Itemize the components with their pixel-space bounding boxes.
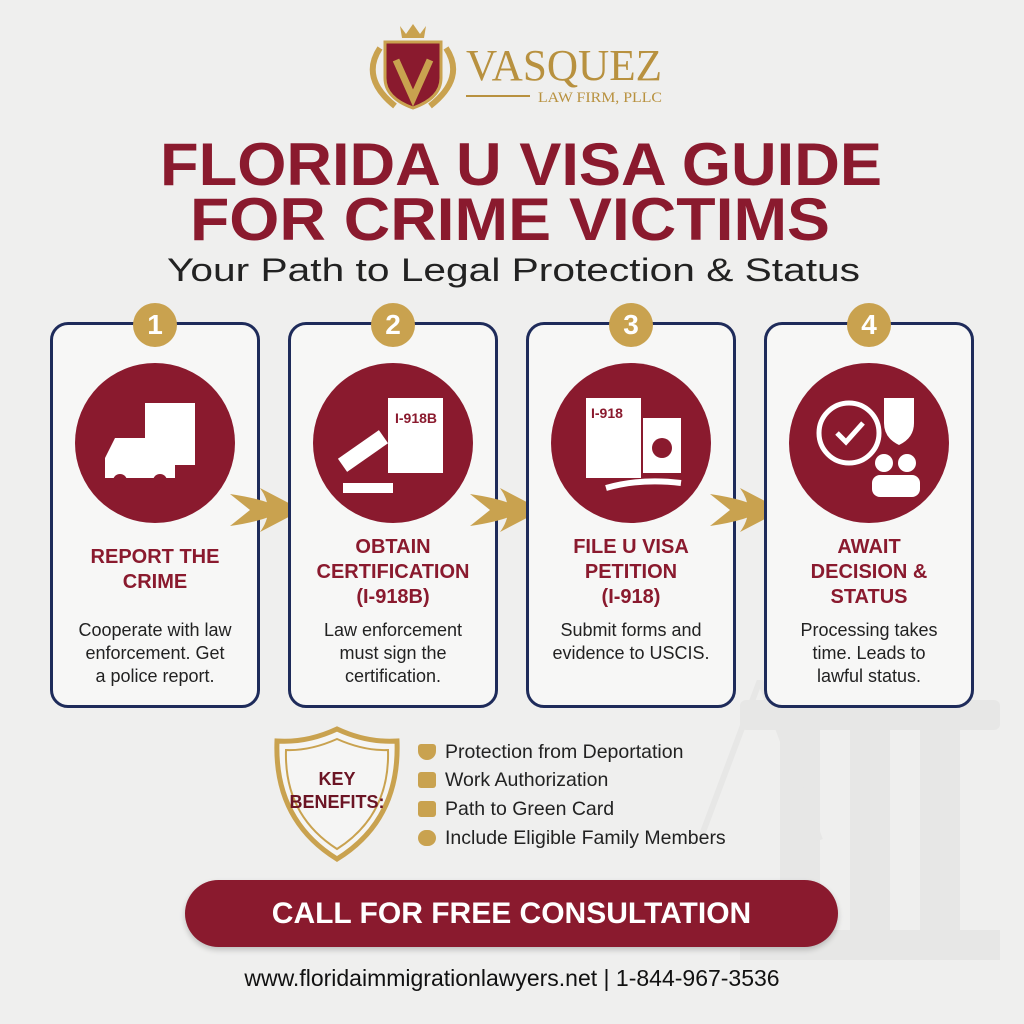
card 2: CERTIFICATION (317, 561, 469, 583)
icon: clock and family (789, 363, 949, 523)
card 4: time. Leads to (812, 643, 926, 663)
card 1: CRIME (123, 571, 187, 593)
card 2 (288, 322, 498, 708)
card 3: PETITION (585, 561, 677, 583)
key benefits shield: BENEFITS: (289, 792, 385, 812)
card 1: REPORT THE (91, 546, 219, 568)
card 1: Cooperate with law (78, 620, 232, 640)
card 3: (I-918) (602, 586, 660, 608)
card 2: Law enforcement (324, 620, 462, 640)
contact line: www.floridaimmigrationlawyers.net | 1-844-967-3536 (244, 965, 780, 991)
card 4 (764, 322, 974, 708)
card 3 (526, 322, 736, 708)
card 4: Processing takes (800, 620, 938, 640)
benefits list: Work Authorization (445, 769, 608, 791)
title: FLORIDA U VISA GUIDE (160, 131, 882, 198)
icon: gavel (313, 363, 473, 523)
CTA button (185, 880, 838, 947)
logo: VASQUEZ (466, 41, 662, 90)
arrow 3 (710, 488, 764, 532)
card 1: 1 (147, 309, 163, 340)
card 2: 2 (385, 309, 401, 340)
card 4: 4 (861, 309, 877, 340)
card 1: a police report. (95, 666, 215, 686)
CTA button: CALL FOR FREE CONSULTATION (272, 897, 751, 930)
title: FOR CRIME VICTIMS (190, 186, 830, 253)
icon: gavel: I-918B (395, 410, 437, 426)
benefits list: Path to Green Card (445, 798, 614, 820)
title (160, 131, 882, 288)
card 3: Submit forms and (560, 620, 702, 640)
logo: LAW FIRM, PLLC (538, 90, 662, 106)
card 2: must sign the (339, 643, 447, 663)
logo (370, 24, 662, 110)
icon: forms (551, 363, 711, 523)
icon: forms: I-918 (591, 405, 623, 421)
card 3: 3 (623, 309, 639, 340)
card 3: FILE U VISA (573, 536, 689, 558)
card 4: AWAIT (837, 536, 901, 558)
card 4: lawful status. (817, 666, 921, 686)
card 2: OBTAIN (355, 536, 431, 558)
benefits list: Protection from Deportation (445, 741, 683, 763)
card 1 (50, 322, 260, 708)
benefits list: Include Eligible Family Members (445, 827, 726, 849)
benefits list (418, 741, 726, 849)
arrow 1 (230, 488, 288, 532)
card 2: certification. (345, 666, 441, 686)
card 4: DECISION & (811, 561, 927, 583)
card 2: (I-918B) (356, 586, 430, 608)
icon: police car (75, 363, 235, 523)
background pillar decoration (740, 700, 819, 841)
subtitle: Your Path to Legal Protection & Status (167, 252, 860, 288)
key benefits shield: KEY (318, 769, 356, 789)
arrow 2 (470, 488, 526, 532)
card 4: STATUS (830, 586, 908, 608)
card 3: evidence to USCIS. (552, 643, 710, 663)
card 1: enforcement. Get (85, 643, 225, 663)
key benefits shield (274, 726, 400, 862)
